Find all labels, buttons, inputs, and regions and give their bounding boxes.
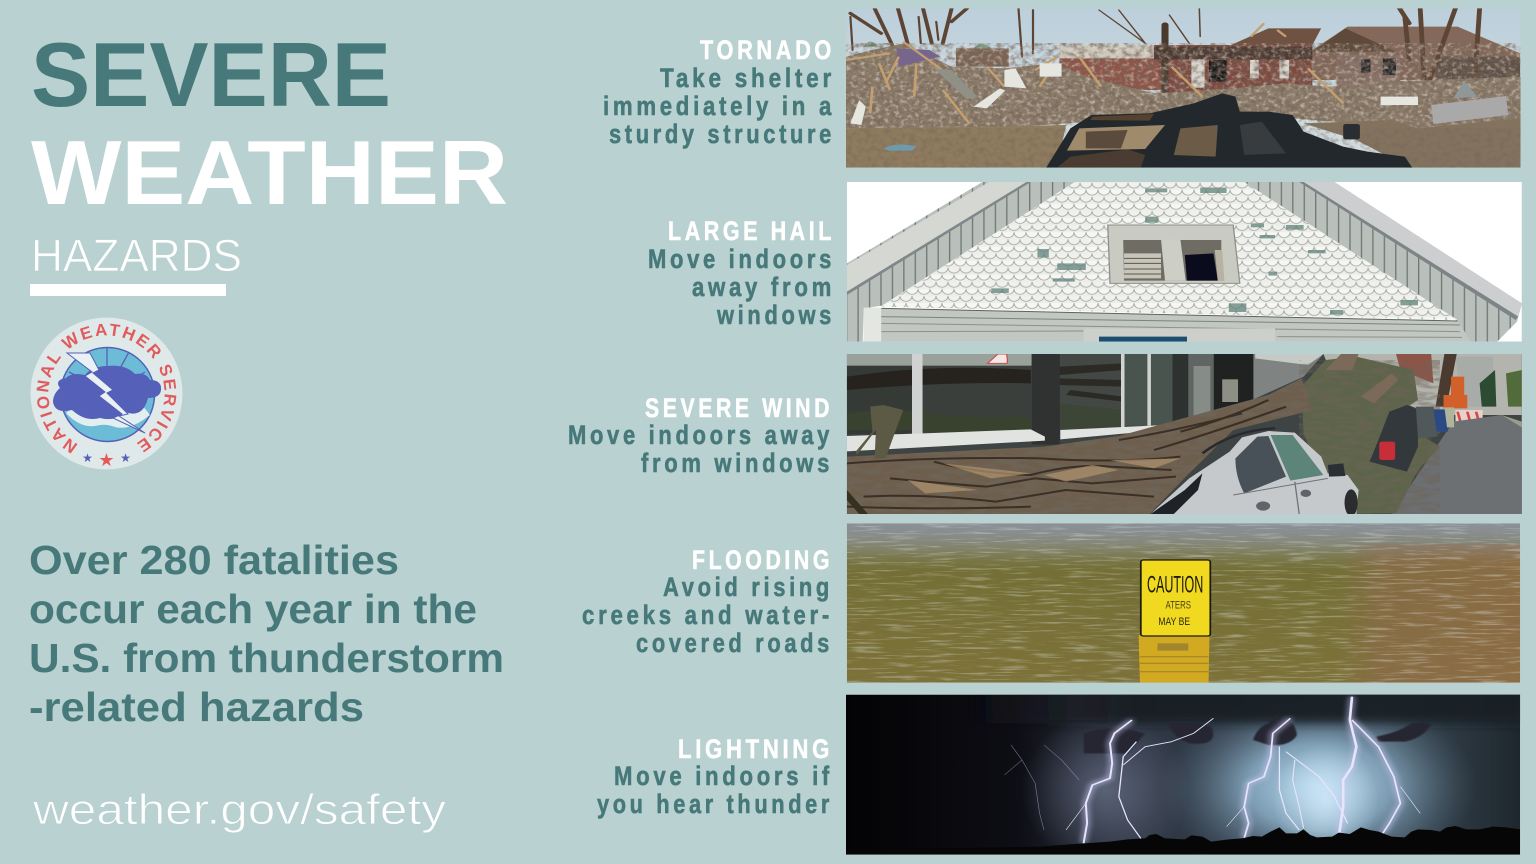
heading: weather: WEATHER <box>31 123 508 224</box>
storefront windows <box>847 354 913 434</box>
bare trees <box>848 8 1482 93</box>
label: large hail: away from <box>692 272 835 302</box>
subheading: hazards: HAZARDS <box>31 230 242 281</box>
street buildings <box>1323 354 1522 415</box>
caution sign: ATERS <box>1165 598 1191 611</box>
label: lightning: you hear thunder <box>597 789 833 819</box>
building ruins <box>1059 45 1154 58</box>
logo stars <box>82 450 131 471</box>
white debris <box>850 63 1418 125</box>
logo lightning bolt <box>67 353 145 433</box>
storm clouds <box>1084 715 1431 753</box>
label: severe wind: SEVERE WIND <box>645 393 833 423</box>
website link: weather.gov/safety <box>32 786 447 834</box>
label: large hail: LARGE HAIL <box>668 216 835 246</box>
left roof eave <box>847 182 1075 342</box>
logo stars: ★ <box>120 451 131 465</box>
logo sky disc <box>60 348 154 442</box>
burned car <box>1046 93 1412 168</box>
label: tornado <box>603 35 835 149</box>
debris field <box>846 43 1521 133</box>
photo: tree fallen on car <box>847 354 1522 516</box>
right roof eave <box>1244 182 1522 342</box>
broken sapling <box>856 405 903 458</box>
parked cars <box>1370 405 1418 472</box>
attic window <box>1108 225 1240 283</box>
label: large hail <box>648 216 835 330</box>
caution sign <box>1141 560 1210 636</box>
photo: tornado damage <box>846 8 1521 168</box>
label: flooding: Avoid rising <box>663 572 833 602</box>
logo lower white band <box>66 400 150 428</box>
label: flooding <box>582 545 833 658</box>
photo: flooded caution sign <box>847 523 1520 683</box>
heading: severe: SEVERE <box>31 25 391 126</box>
photo: flooded caution sign: CAUTION <box>1147 571 1203 599</box>
label: tornado: TORNADO <box>700 35 835 65</box>
text block: fatalities statistic: U.S. from thunderstorm <box>29 635 504 681</box>
label: tornado: Take shelter <box>660 63 835 93</box>
label: tornado: sturdy structure <box>609 119 835 149</box>
text block: fatalities statistic: occur each year in the <box>29 586 477 632</box>
label: tornado: immediately in a <box>603 91 835 121</box>
logo cloud <box>53 366 161 419</box>
text block: fatalities statistic: -related hazards <box>29 684 364 730</box>
label: lightning: Move indoors if <box>614 761 833 791</box>
label: flooding: creeks and water- <box>582 600 833 630</box>
label: flooding: covered roads <box>636 628 833 658</box>
label: severe wind: from windows <box>641 448 833 478</box>
photo: lightning storm <box>846 694 1520 855</box>
lightning bolts <box>1004 697 1420 843</box>
title <box>30 25 508 296</box>
splintered wood <box>846 23 1343 123</box>
fallen tree foliage <box>1301 357 1440 514</box>
road <box>1392 415 1522 514</box>
shingled gable wall <box>881 182 1458 320</box>
label: flooding: FLOODING <box>692 545 833 575</box>
logo stars: ★ <box>98 450 115 471</box>
label: lightning: LIGHTNING <box>678 734 833 764</box>
photo: hail damaged house <box>847 182 1522 342</box>
text block: fatalities statistic <box>29 537 504 730</box>
tree line silhouette <box>846 826 1520 855</box>
bare ground <box>846 125 1066 168</box>
trunk <box>847 378 1312 514</box>
lower siding <box>864 308 1471 342</box>
label: severe wind: Move indoors away <box>568 420 833 450</box>
logo ring text: NATIONAL WEATHER SERVICE <box>36 324 176 454</box>
lightning glow <box>1084 697 1400 843</box>
text block: fatalities statistic: Over 280 fatalities <box>29 537 399 583</box>
icon: National Weather Service logo <box>30 318 182 471</box>
caution sign: MAY BE <box>1158 616 1190 628</box>
white ledge <box>847 429 1045 451</box>
logo stars: ★ <box>82 451 93 465</box>
label: large hail: Move indoors <box>648 244 835 274</box>
sign reflection <box>1139 635 1209 683</box>
silver car <box>1150 431 1359 514</box>
underline bar <box>30 284 226 296</box>
pillars and doorway <box>1032 354 1060 445</box>
label: lightning <box>597 734 833 819</box>
label: severe wind <box>568 393 833 478</box>
label: large hail: windows <box>716 300 835 330</box>
